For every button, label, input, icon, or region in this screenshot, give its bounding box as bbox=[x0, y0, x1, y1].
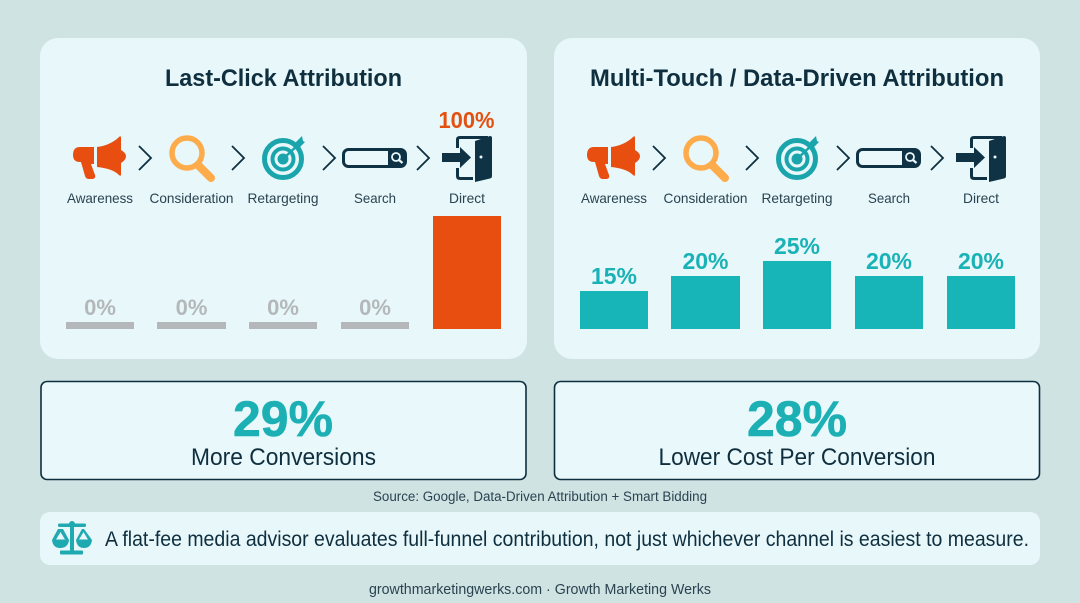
icon: megaphone bbox=[587, 136, 640, 179]
step labels: Search bbox=[354, 190, 396, 206]
arrow bbox=[139, 146, 151, 170]
step labels bbox=[581, 190, 999, 206]
step labels: Search bbox=[868, 190, 910, 206]
step labels: Consideration bbox=[150, 190, 234, 206]
panel: multi-touch attribution bbox=[554, 38, 1040, 359]
source note: Source: Google, Data-Driven Attribution + Smart Bidding bbox=[373, 489, 707, 504]
icon: door bbox=[956, 136, 1006, 182]
bar chart: last-click credit: 0% bbox=[176, 295, 207, 320]
label: 100%: 100% bbox=[438, 107, 494, 133]
bar chart: last-click credit bbox=[66, 216, 501, 329]
panel: last-click attribution bbox=[40, 38, 527, 359]
bar chart: data-driven credit: 20% bbox=[682, 248, 729, 274]
stat box: lower cost: 28% bbox=[747, 391, 847, 447]
stat box: lower cost bbox=[554, 382, 1040, 480]
icon: magnifier bbox=[686, 138, 725, 178]
bar chart: last-click credit: 0% bbox=[84, 295, 116, 320]
icon: magnifier bbox=[172, 138, 211, 178]
bar chart: data-driven credit: 20% bbox=[866, 248, 912, 274]
arrow bbox=[653, 146, 665, 170]
step labels: Retargeting bbox=[762, 190, 832, 206]
step labels: Direct bbox=[449, 190, 485, 206]
stat box: more conversions: 29% bbox=[233, 391, 333, 447]
step labels: Awareness bbox=[67, 190, 133, 206]
arrow bbox=[417, 146, 429, 170]
bar chart: data-driven credit bbox=[580, 233, 1015, 329]
icon: search bar bbox=[858, 150, 920, 166]
arrow bbox=[232, 146, 244, 170]
step labels bbox=[67, 190, 485, 206]
step labels: Consideration bbox=[664, 190, 748, 206]
icon: door bbox=[442, 136, 492, 182]
arrow bbox=[323, 146, 335, 170]
arrow bbox=[931, 146, 943, 170]
icon: megaphone bbox=[73, 136, 126, 179]
callout text: A flat-fee media advisor evaluates full-funnel contribution, not just whichever channel is easiest to measure. bbox=[105, 528, 1029, 551]
bar chart: data-driven credit: 25% bbox=[774, 233, 820, 259]
icon: search bar bbox=[344, 150, 406, 166]
callout bar bbox=[40, 512, 1040, 565]
bar chart: data-driven credit: 20% bbox=[958, 248, 1004, 274]
icon: target bbox=[778, 136, 819, 178]
arrow bbox=[746, 146, 758, 170]
stat box: more conversions: More Conversions bbox=[191, 444, 376, 471]
icon: target bbox=[264, 136, 305, 178]
footer: growthmarketingwerks.com · Growth Marketing Werks bbox=[369, 582, 711, 598]
bar chart: last-click credit: 0% bbox=[267, 295, 299, 320]
heading: last-click: Last-Click Attribution bbox=[165, 65, 402, 92]
step labels: Retargeting bbox=[248, 190, 318, 206]
stat box: lower cost: Lower Cost Per Conversion bbox=[658, 444, 936, 471]
bar chart: last-click credit: 0% bbox=[359, 295, 391, 320]
heading: multi-touch: Multi-Touch / Data-Driven Attribution bbox=[590, 65, 1004, 92]
arrow bbox=[837, 146, 849, 170]
icon: scales bbox=[52, 521, 92, 554]
step labels: Direct bbox=[963, 190, 999, 206]
bar chart: data-driven credit: 15% bbox=[591, 263, 637, 289]
stat box: more conversions bbox=[41, 382, 526, 480]
step labels: Awareness bbox=[581, 190, 647, 206]
